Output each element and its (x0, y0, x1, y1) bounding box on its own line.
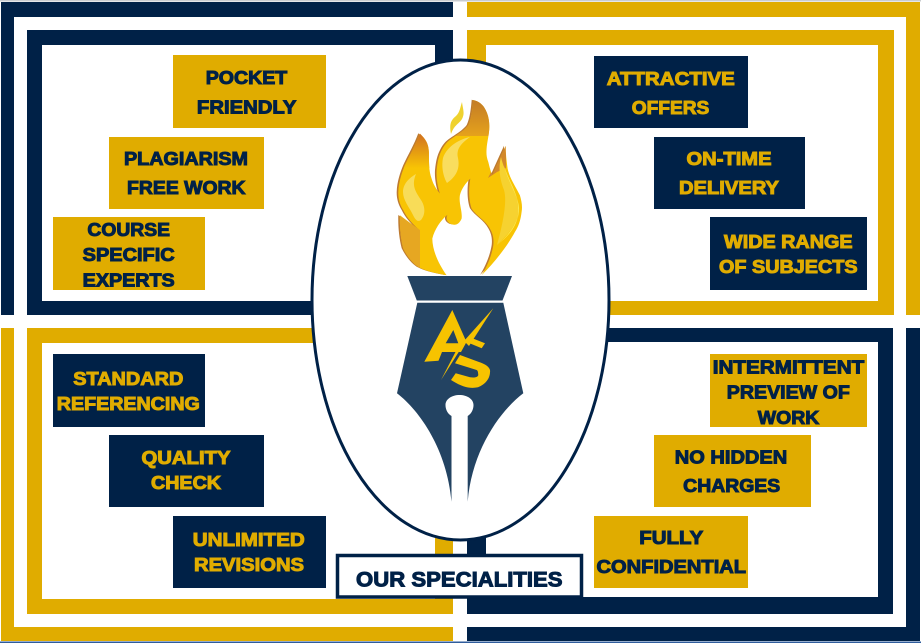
box: quality check: CHECK (151, 472, 222, 493)
title: our specialities (338, 556, 582, 597)
box: wide range of subjects (710, 217, 867, 290)
box: no hidden charges (654, 435, 811, 507)
icon: torch flame (395, 95, 522, 275)
box: plagiarism free work: PLAGIARISM (124, 148, 248, 169)
box: standard referencing: REFERENCING (57, 393, 200, 414)
box: unlimited revisions: UNLIMITED (193, 529, 305, 550)
icon: AS monogram (424, 308, 493, 388)
box: on-time delivery (654, 137, 805, 209)
box: on-time delivery: DELIVERY (679, 177, 780, 198)
box: course specific experts (53, 217, 205, 291)
box: plagiarism free work: FREE WORK (127, 177, 246, 198)
box: intermittent preview of work (710, 354, 867, 428)
title: our specialities: OUR SPECIALITIES (356, 569, 563, 592)
box: quality check (109, 435, 264, 507)
box: course specific experts: EXPERTS (83, 270, 175, 291)
box: course specific experts: SPECIFIC (83, 244, 175, 265)
box: no hidden charges: CHARGES (683, 475, 780, 496)
box: attractive offers: ATTRACTIVE (607, 68, 735, 89)
box: pocket friendly: FRIENDLY (197, 96, 297, 117)
box: course specific experts: COURSE (87, 219, 170, 240)
box: fully confidential: FULLY (639, 527, 704, 548)
box: pocket friendly: POCKET (206, 67, 288, 88)
box: intermittent preview of work: INTERMITTENT (713, 356, 865, 377)
box: standard referencing: STANDARD (73, 368, 183, 389)
panel: top-left navy frame (1, 2, 453, 315)
box: pocket friendly (173, 55, 326, 128)
icon: pen nib (397, 276, 523, 502)
box: no hidden charges: NO HIDDEN (675, 446, 787, 467)
panel: top-right gold frame (467, 2, 920, 315)
box: plagiarism free work (109, 137, 264, 209)
box: intermittent preview of work: WORK (758, 407, 820, 428)
box: on-time delivery: ON-TIME (686, 148, 772, 169)
box: unlimited revisions: REVISIONS (194, 554, 304, 575)
box: wide range of subjects: OF SUBJECTS (719, 256, 858, 277)
panel: bottom-right navy frame (467, 328, 920, 641)
box: intermittent preview of work: PREVIEW OF (727, 381, 850, 402)
box: attractive offers (594, 56, 748, 128)
central oval (312, 60, 609, 540)
panel: bottom-left gold frame (1, 328, 453, 641)
box: unlimited revisions (173, 516, 326, 588)
box: attractive offers: OFFERS (632, 97, 709, 118)
box: standard referencing (53, 354, 205, 427)
box: quality check: QUALITY (142, 447, 231, 468)
box: wide range of subjects: WIDE RANGE (724, 231, 853, 252)
box: fully confidential: CONFIDENTIAL (597, 556, 746, 577)
box: fully confidential (594, 516, 748, 588)
